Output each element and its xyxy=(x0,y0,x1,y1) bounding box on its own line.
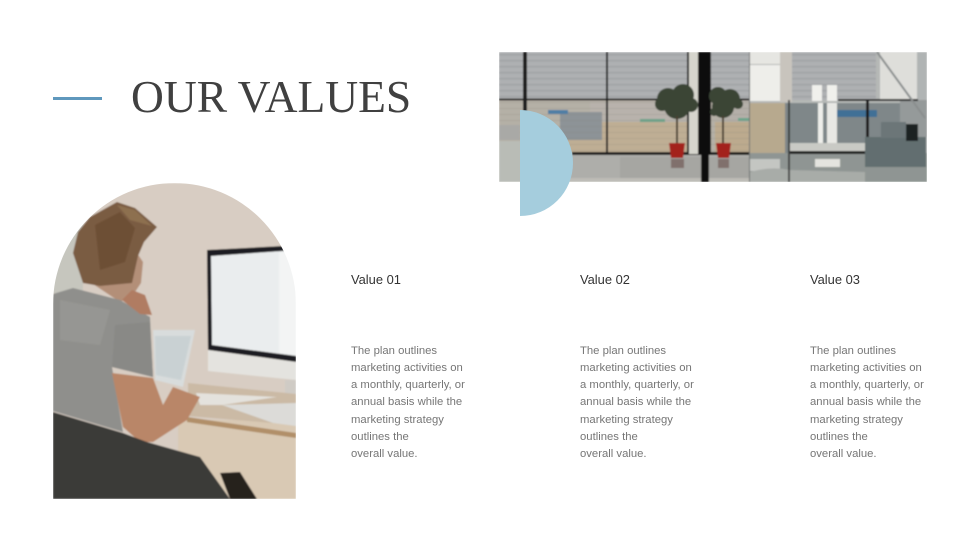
body text: value 03: marketing activities on xyxy=(810,362,922,374)
column: value 02 xyxy=(580,272,694,460)
body text: value 02: a monthly, quarterly, or xyxy=(580,379,694,391)
body text: value 01: annual basis while the xyxy=(351,396,462,408)
photo: man working at a desk in an arched frame xyxy=(53,183,296,499)
body text: value 03: overall value. xyxy=(810,448,877,460)
title: OUR VALUES xyxy=(131,71,411,122)
body text: value 03: The plan outlines xyxy=(810,344,896,356)
body text: value 02: marketing strategy xyxy=(580,414,673,426)
monitor xyxy=(207,246,296,362)
body text: value 01: outlines the xyxy=(351,431,409,443)
body text: value 03: annual basis while the xyxy=(810,396,921,408)
body text: value 01 xyxy=(351,344,465,460)
title accent line xyxy=(53,97,102,100)
heading: value 03: Value 03 xyxy=(810,272,860,287)
body text: value 02: marketing activities on xyxy=(580,362,692,374)
chair xyxy=(53,412,230,499)
left low block xyxy=(499,141,520,178)
body text: value 03: marketing strategy xyxy=(810,414,903,426)
body text: value 01: The plan outlines xyxy=(351,344,437,356)
body text: value 02: overall value. xyxy=(580,448,647,460)
body text: value 02: The plan outlines xyxy=(580,344,666,356)
hair xyxy=(73,202,157,286)
shirt xyxy=(53,288,153,432)
arm and hand xyxy=(112,373,200,442)
body text: value 01: marketing strategy xyxy=(351,414,444,426)
body text: value 03 xyxy=(810,344,924,460)
body text: value 02 xyxy=(580,344,694,460)
heading: value 02: Value 02 xyxy=(580,272,630,287)
face and neck xyxy=(95,255,144,302)
body text: value 01: marketing activities on xyxy=(351,362,463,374)
body text: value 03: outlines the xyxy=(810,431,868,443)
reception desk right xyxy=(865,137,926,167)
laptop xyxy=(153,330,195,387)
body text: value 01: a monthly, quarterly, or xyxy=(351,379,465,391)
body text: value 01: overall value. xyxy=(351,448,418,460)
heading: value 01: Value 01 xyxy=(351,272,401,287)
trees xyxy=(655,84,743,119)
photo: office lobby with potted trees xyxy=(499,52,927,182)
body text: value 02: outlines the xyxy=(580,431,638,443)
body text: value 03: a monthly, quarterly, or xyxy=(810,379,924,391)
column: value 01 xyxy=(351,272,465,460)
desk xyxy=(188,383,296,425)
dark frames xyxy=(499,52,918,182)
body text: value 02: annual basis while the xyxy=(580,396,691,408)
column: value 03 xyxy=(810,272,924,460)
